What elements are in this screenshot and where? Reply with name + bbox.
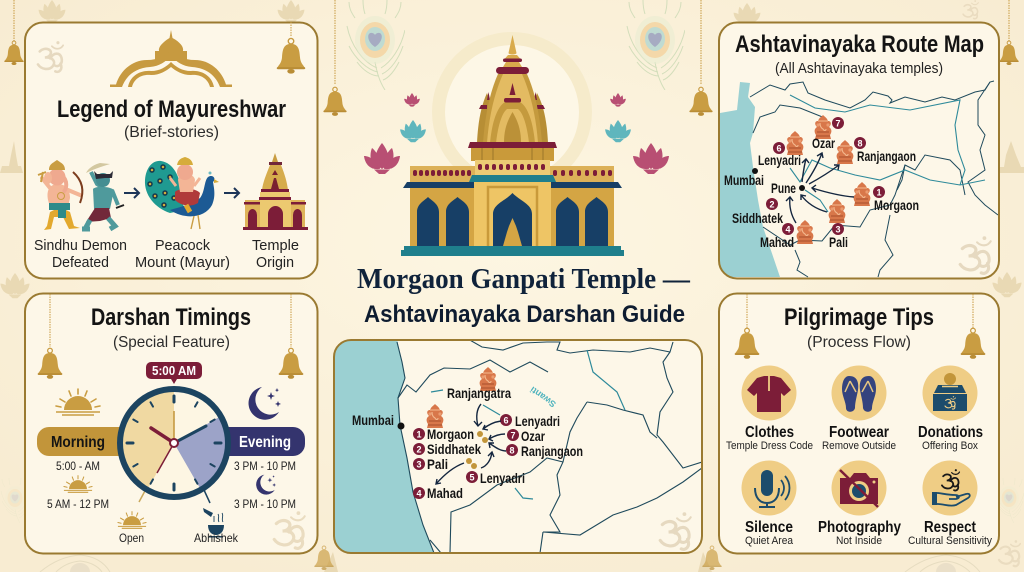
tip: silence bbox=[742, 460, 796, 547]
title: Ashtavinayaka Darshan Guide bbox=[364, 301, 685, 328]
time badge bbox=[146, 362, 202, 384]
icon: morning sun bbox=[56, 389, 100, 415]
heading: Ashtavinayaka Route Map bbox=[735, 31, 984, 58]
number markers: 1 bbox=[876, 188, 882, 198]
plinth bbox=[401, 246, 624, 256]
decorative om bbox=[963, 0, 1020, 566]
stop 7 Ozar: 7 bbox=[510, 430, 516, 440]
subheading: (Special Feature) bbox=[113, 334, 230, 351]
place labels: Ranjangaon bbox=[857, 148, 916, 164]
heading: Darshan Timings bbox=[91, 304, 251, 331]
tip: clothes: Temple Dress Code bbox=[726, 440, 813, 452]
icon: abhishek bowl bbox=[203, 508, 224, 538]
evening pill bbox=[225, 427, 305, 456]
wings and roof bbox=[403, 166, 622, 246]
city markers bbox=[752, 168, 805, 191]
icon: Ganesha bbox=[427, 404, 443, 428]
icon: om watermark bbox=[274, 511, 305, 548]
tip: donations: Donations bbox=[918, 424, 983, 441]
icon: small moon bbox=[256, 475, 276, 495]
place labels: Lenyadri bbox=[758, 152, 801, 168]
icon: Ganesha bbox=[480, 367, 496, 391]
caption: Temple Origin: Origin bbox=[256, 254, 294, 271]
stop 1 Morgaon: Morgaon bbox=[427, 426, 474, 442]
tip: photography: Not Inside bbox=[836, 535, 882, 547]
tip: respect: Respect bbox=[924, 519, 977, 536]
route arrows bbox=[786, 153, 854, 223]
icon: right bell bbox=[961, 294, 985, 359]
stop 2 Siddhatek: 2 bbox=[416, 444, 422, 454]
tip: footwear: Footwear bbox=[829, 424, 889, 441]
stop 6 Lenyadri bbox=[500, 413, 560, 429]
icon: open sun bbox=[118, 512, 146, 528]
stop 1 Morgaon: 1 bbox=[416, 430, 422, 440]
caption: Peacock Mount: Mount (Mayur) bbox=[135, 254, 230, 271]
stop 3 Pali bbox=[413, 456, 448, 472]
text: evening range: 3 PM - 10 PM bbox=[234, 497, 296, 511]
tip: clothes bbox=[726, 366, 813, 452]
text: morning hours: 5:00 - AM bbox=[56, 459, 100, 473]
caption: Sindhu Demon Defeated: Sindhu Demon bbox=[34, 237, 127, 254]
label: Ranjangatra: Ranjangatra bbox=[447, 385, 511, 401]
icon: om watermark bbox=[660, 512, 691, 549]
central temple illustration bbox=[364, 35, 669, 256]
morning pill: Morning bbox=[51, 434, 105, 451]
panel: central map bbox=[333, 339, 702, 553]
subheading: (Brief-stories) bbox=[124, 124, 219, 141]
icon: om watermark bbox=[960, 236, 991, 273]
stop 8 Ranjangaon: Ranjangaon bbox=[521, 443, 583, 459]
tip: respect: Cultural Sensitivity bbox=[908, 535, 992, 547]
stop 8 Ranjangaon: 8 bbox=[509, 446, 515, 456]
evening pill: Evening bbox=[239, 434, 291, 451]
map geography bbox=[333, 339, 702, 553]
number markers: 6 bbox=[776, 144, 782, 154]
lotus flowers bbox=[364, 93, 669, 174]
panel: route map bbox=[719, 22, 999, 278]
panel: darshan timings bbox=[25, 294, 318, 554]
subheading: (Process Flow) bbox=[807, 334, 911, 351]
stop 7 Ozar: Ozar bbox=[521, 428, 545, 444]
stop 8 Ranjangaon bbox=[506, 443, 583, 459]
arrow bbox=[124, 188, 139, 198]
place labels bbox=[724, 135, 919, 250]
stop 2 Siddhatek: Siddhatek bbox=[427, 441, 481, 457]
icon: hanging bell bbox=[277, 22, 305, 74]
tip: donations: Offering Box bbox=[922, 440, 978, 452]
number markers bbox=[766, 117, 885, 235]
central gate bbox=[469, 160, 556, 246]
tip: clothes: Clothes bbox=[745, 424, 794, 441]
tip: photography bbox=[818, 460, 901, 547]
stop 4 Mahad: 4 bbox=[416, 488, 422, 498]
place labels: Morgaon bbox=[874, 197, 919, 213]
tip: photography: Photography bbox=[818, 519, 901, 536]
icon: left bell bbox=[38, 294, 62, 379]
tip: footwear: Remove Outside bbox=[822, 440, 896, 452]
caption: Peacock Mount: Peacock bbox=[155, 237, 210, 254]
stop 5 Lenyadri: Lenyadri bbox=[480, 470, 525, 486]
stop 7 Ozar bbox=[507, 428, 545, 444]
stop 6 Lenyadri: Lenyadri bbox=[515, 413, 560, 429]
number markers: 8 bbox=[857, 138, 863, 148]
place labels: Mumbai bbox=[724, 172, 764, 188]
tip: donations bbox=[918, 366, 983, 452]
tower bbox=[468, 35, 557, 161]
tip: silence: Quiet Area bbox=[745, 535, 794, 547]
tip: footwear bbox=[822, 366, 896, 452]
halo bbox=[438, 38, 586, 186]
clock bbox=[120, 389, 228, 503]
illustration: Ganesha fighting Sindhu demon bbox=[38, 160, 124, 230]
route dots bbox=[466, 431, 488, 469]
stop 6 Lenyadri: 6 bbox=[503, 416, 509, 426]
stop 1 Morgaon bbox=[413, 426, 474, 442]
illustration: Ganesha on peacock mount bbox=[145, 157, 219, 229]
icon: small sun bbox=[64, 476, 92, 492]
icon: right bell bbox=[279, 294, 303, 379]
tip: respect bbox=[908, 460, 992, 547]
stop 3 Pali: Pali bbox=[427, 456, 448, 472]
place labels: Ozar bbox=[812, 135, 835, 151]
icons: Ganesha shrines bbox=[787, 115, 870, 244]
heading: Pilgrimage Tips bbox=[784, 304, 934, 331]
text: evening hours: 3 PM - 10 PM bbox=[234, 459, 296, 473]
morning pill bbox=[37, 427, 120, 456]
marker: Mumbai bbox=[398, 422, 404, 430]
number markers: 4 bbox=[785, 224, 791, 234]
time badge: 5:00 AM bbox=[152, 363, 196, 378]
stop 3 Pali: 3 bbox=[416, 460, 422, 470]
place labels: Pali bbox=[829, 234, 848, 250]
panel: pilgrimage tips bbox=[719, 294, 999, 554]
stop 5 Lenyadri: 5 bbox=[469, 472, 475, 482]
label: Open: Open bbox=[119, 531, 144, 545]
stop 2 Siddhatek bbox=[413, 441, 481, 457]
subheading: (All Ashtavinayaka temples) bbox=[775, 60, 943, 77]
tip: silence: Silence bbox=[745, 519, 793, 536]
icon: temple arch ornament bbox=[110, 30, 232, 87]
place labels: Mahad bbox=[760, 234, 794, 250]
number markers: 2 bbox=[769, 200, 775, 210]
place labels: Siddhatek bbox=[732, 210, 783, 226]
number markers: 7 bbox=[835, 118, 841, 128]
route map geography bbox=[720, 81, 998, 277]
stop 5 Lenyadri bbox=[466, 470, 525, 486]
label: Abhishek: Abhishek bbox=[194, 531, 239, 545]
stop 4 Mahad bbox=[413, 485, 463, 501]
stop 4 Mahad: Mahad bbox=[427, 485, 463, 501]
text: morning range: 5 AM - 12 PM bbox=[47, 497, 109, 511]
title bbox=[357, 264, 691, 328]
illustration: temple origin bbox=[243, 153, 308, 230]
route arrows bbox=[436, 404, 506, 484]
arrow bbox=[224, 188, 239, 198]
title: Morgaon Ganpati Temple — bbox=[357, 264, 691, 295]
place labels: Pune bbox=[771, 180, 796, 196]
teal river label: Swanti bbox=[528, 385, 558, 409]
caption: Temple Origin: Temple bbox=[252, 237, 299, 254]
label: Mumbai: Mumbai bbox=[352, 412, 394, 428]
icon: evening moon bbox=[249, 387, 281, 420]
panel: legend of Mayureshwar bbox=[25, 22, 318, 278]
icon: left bell bbox=[735, 294, 759, 359]
icon: om watermark bbox=[38, 41, 63, 72]
caption: Sindhu Demon Defeated: Defeated bbox=[52, 254, 109, 271]
number markers: 3 bbox=[835, 224, 841, 234]
heading: Legend of Mayureshwar bbox=[57, 96, 286, 123]
